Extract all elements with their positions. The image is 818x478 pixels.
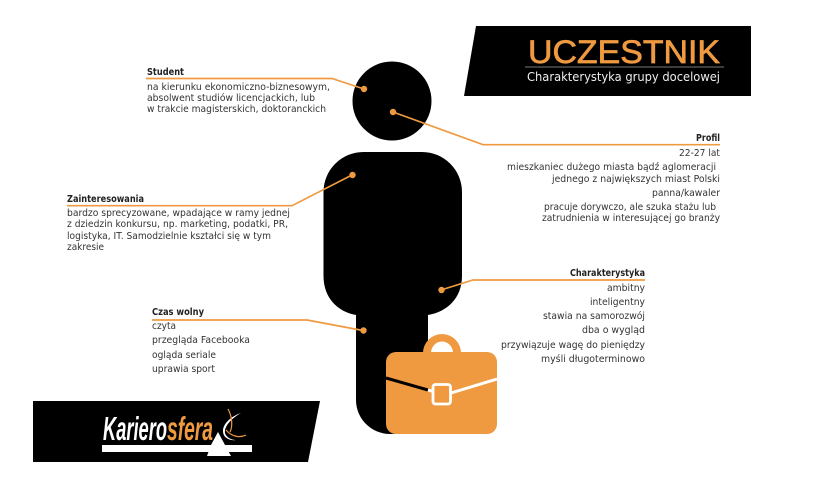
callout: Charakterystyka: ambitny: [607, 283, 645, 294]
logo banner: Karierosfera: Kariero: [103, 410, 167, 447]
callout: Profil: panna/kawaler: [652, 188, 721, 199]
callout: Student: na kierunku ekonomiczno-biznesowym,: [147, 82, 330, 93]
title banner: [464, 26, 751, 96]
logo banner: Karierosfera: [33, 401, 320, 462]
callout: Profil: [390, 109, 721, 224]
callout: Charakterystyka: inteligentny: [590, 297, 645, 308]
callout: Student: w trakcie magisterskich, doktoranckich: [147, 104, 326, 115]
callout: Student: [146, 67, 367, 115]
callout: Czas wolny: ogląda seriale: [152, 350, 216, 361]
callout: Charakterystyka: [438, 268, 645, 365]
callout: Charakterystyka: dba o wygląd: [582, 325, 645, 336]
callout: Student: absolwent studiów licencjackich, lub: [147, 92, 315, 104]
callout: Profil: mieszkaniec dużego miasta bądź aglomeracji: [507, 161, 716, 173]
title banner: Charakterystyka grupy docelowej: [527, 70, 720, 84]
callout: Charakterystyka: przywiązuje wagę do pieniędzy: [501, 340, 645, 351]
callout: Charakterystyka: Charakterystyka: [570, 268, 645, 279]
title banner: UCZESTNIK: [528, 34, 720, 70]
callout: Zainteresowania: zakresie: [67, 242, 104, 253]
callout: Czas wolny: przegląda Facebooka: [152, 335, 250, 346]
callout: Czas wolny: uprawia sport: [152, 364, 215, 375]
callout: Profil: Profil: [696, 133, 720, 144]
callout: Zainteresowania: Zainteresowania: [67, 194, 144, 205]
callout: Czas wolny: czyta: [152, 321, 176, 332]
callout: Zainteresowania: z dziedzin konkursu, np. marketing, podatki, PR,: [67, 219, 288, 230]
callout: Czas wolny: [152, 307, 367, 375]
callout: Charakterystyka: myśli długoterminowo: [541, 353, 645, 365]
person silhouette: [324, 62, 462, 434]
callout: Zainteresowania: bardzo sprecyzowane, wpadające w ramy jednej: [67, 208, 290, 219]
logo banner: Karierosfera: sfera: [167, 410, 213, 447]
callout: Profil: jednego z największych miast Polski: [551, 174, 720, 185]
callout: Student: Student: [147, 67, 184, 78]
callout: Profil: zatrudnienia w interesującej go branży: [542, 213, 720, 224]
callout: Charakterystyka: stawia na samorozwój: [543, 310, 645, 322]
callout: Profil: 22-27 lat: [679, 148, 720, 159]
callout: Profil: pracuje dorywczo, ale szuka stażu lub: [544, 202, 716, 213]
callout: Zainteresowania: logistyka, IT. Samodzielnie kształci się w tym: [67, 231, 271, 242]
icon: briefcase: [386, 334, 497, 434]
callout: Czas wolny: Czas wolny: [152, 307, 204, 318]
callout: Zainteresowania: [67, 172, 356, 253]
